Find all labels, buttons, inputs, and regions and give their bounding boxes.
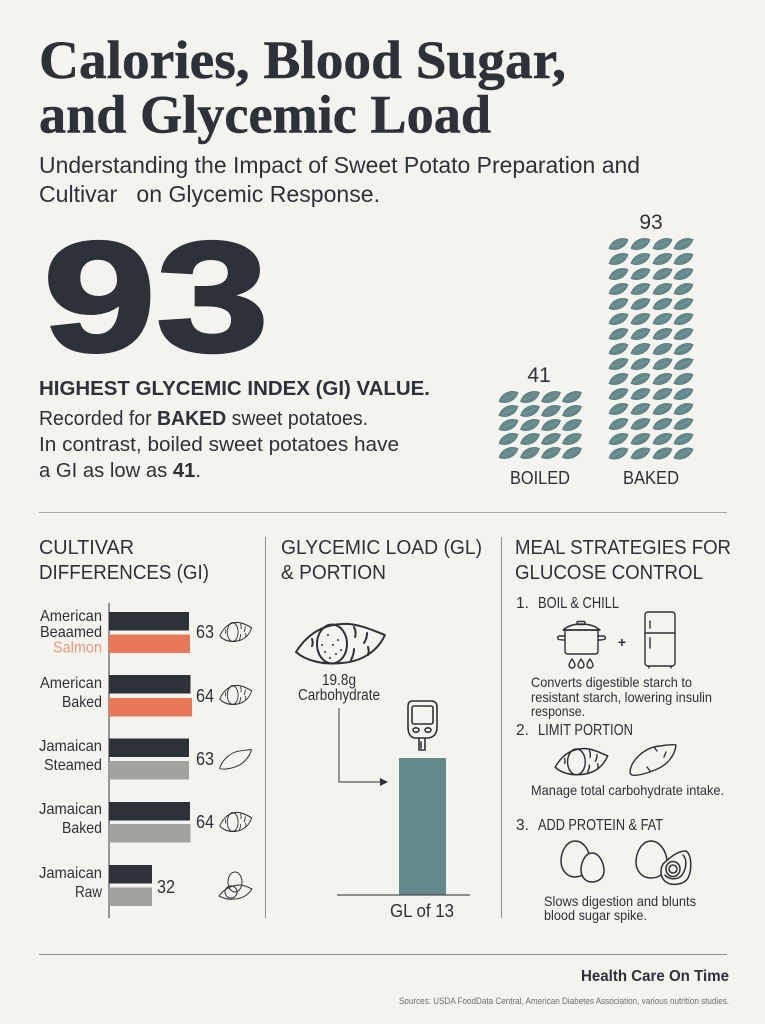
bar: GL of 13 [399,758,446,895]
icon: refrigerator [645,612,675,668]
bars: Jamaican Steamed: Jamaican [39,738,102,755]
carbohydrate label: Carbohydrate [298,687,380,704]
icon: sweet potato cut 3 [220,812,252,831]
icon: large sweet potato [296,624,385,664]
step 2 heading: LIMIT PORTION [538,722,633,739]
key fact text: In contrast, boiled sweet potatoes have [39,434,399,456]
step 2 heading [516,722,633,739]
baked leaf column [609,238,693,459]
bars: American Baked [40,675,214,716]
bars: American Beaamed Salmon [40,608,214,656]
step 3 text: blood sugar spike. [544,907,647,923]
heading: glycemic load [281,537,482,584]
big number 93: 93 [43,210,269,385]
bars: American Baked: 64 [196,686,214,706]
bars: American Beaamed Salmon: American [40,608,102,625]
heading: meal strategies: GLUCOSE CONTROL [515,562,703,584]
icon: sweet potato cut 2 [220,685,252,704]
heading: cultivar differences: DIFFERENCES (GI) [39,562,209,584]
step 3 text: Slows digestion and blunts [544,893,696,909]
key fact text: Recorded for BAKED sweet potatoes. [39,408,368,430]
bars: Jamaican Steamed: Steamed [44,757,102,774]
bars: American Beaamed Salmon: Beaamed [40,624,102,641]
bars: Jamaican Baked: Baked [62,820,102,837]
sources: Sources: USDA FoodData Central, American Diabetes Association, various nutrition studies. [399,996,729,1006]
bars: Jamaican Baked: Jamaican [39,801,102,818]
key fact text: HIGHEST GLYCEMIC INDEX (GI) VALUE. [39,378,430,400]
bars: American Beaamed Salmon: 63 [196,622,214,642]
heading: meal strategies [515,537,731,584]
carbohydrate label [298,672,380,704]
bars: American Baked: American [40,675,102,692]
key fact text [39,378,430,482]
step 2 text: Manage total carbohydrate intake. [531,782,724,798]
subtitle: Understanding the Impact of Sweet Potato Preparation and [39,152,640,178]
title: and Glycemic Load [39,84,491,144]
boiled label: BOILED [510,467,570,488]
icon: egg and avocado [636,841,691,884]
bars: Jamaican Raw: 32 [157,877,175,897]
icon: glucose meter [408,701,437,750]
bars: Jamaican Raw: Jamaican [39,865,102,882]
bars: Jamaican Baked [39,801,214,842]
subtitle: Cultivar on Glycemic Response. [39,181,380,207]
title: Calories, Blood Sugar, [39,30,566,90]
step 2 heading: 2. [516,722,529,739]
bars: Jamaican Raw [39,865,175,906]
panel: meal strategies [515,537,731,923]
footer brand: Health Care On Time [581,968,729,985]
step 1 text: Converts digestible starch to [531,674,692,690]
step 3 heading: ADD PROTEIN & FAT [538,817,663,834]
bars: Jamaican Steamed: 63 [196,749,214,769]
icon: sweet potato cut 1 [220,622,252,641]
label: GL of 13: GL of 13 [390,901,454,921]
step 1 heading: 1. [516,595,529,612]
pictogram chart: boiled vs baked [499,211,693,488]
step 1 text: response. [531,703,585,719]
icon: sweet potato whole 1 [220,750,251,769]
icon: sweet potato raw [219,872,252,899]
step 1 text: resistant starch, lowering insulin [531,689,712,705]
icon: cut sweet potato [555,749,608,775]
panel: glycemic load [281,537,482,921]
step 1 text [531,674,712,719]
step 1 heading [516,595,619,612]
bar chart: cultivars [39,603,252,918]
bars: American Beaamed Salmon: Salmon [53,640,102,656]
baked value: 93 [639,211,663,234]
panel: cultivar differences [39,537,252,918]
heading: glycemic load: GLYCEMIC LOAD (GL) [281,537,482,559]
heading: cultivar differences: CULTIVAR [39,537,134,559]
step 3 heading: 3. [516,817,529,834]
heading: glycemic load: & PORTION [281,562,386,584]
arrow: carbohydrate to bar [339,708,388,786]
baked label: BAKED [623,467,679,488]
bars: Jamaican Steamed [39,738,214,780]
step 1 heading: BOIL & CHILL [538,595,619,612]
key fact text: a GI as low as 41. [39,460,201,482]
title [39,30,566,144]
heading: cultivar differences [39,537,209,584]
plus sign: + [618,634,626,650]
bars: American Baked: Baked [62,694,102,711]
icon: whole sweet potato [630,745,676,775]
step 3 text [544,893,696,923]
subtitle [39,152,640,207]
carbohydrate label: 19.8g [322,672,356,689]
icon: pot with flame [558,622,605,668]
boiled value: 41 [527,364,551,387]
icon: eggs [561,841,604,882]
heading: meal strategies: MEAL STRATEGIES FOR [515,537,731,559]
boiled leaf column [499,391,582,459]
bars: Jamaican Baked: 64 [196,812,214,832]
bars: Jamaican Raw: Raw [75,884,102,901]
